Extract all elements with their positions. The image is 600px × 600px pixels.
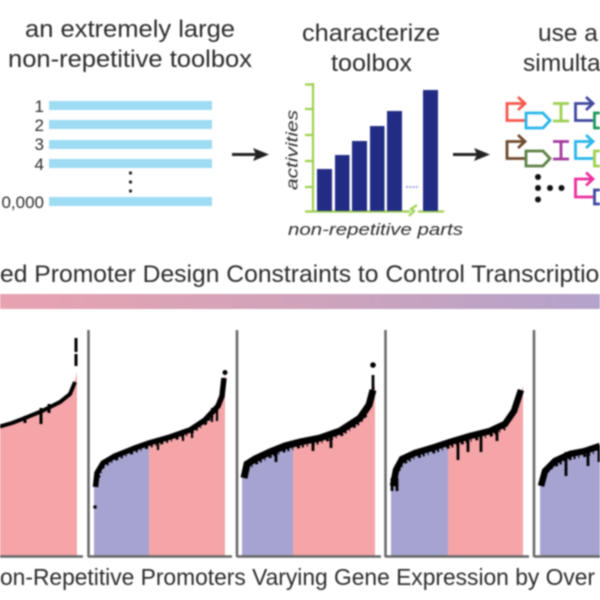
y axis label: activities [282,109,302,190]
vertical ellipsis [129,171,132,193]
panel: promoter activity charts [0,330,600,557]
circuit row 3 [576,172,600,204]
row numbers: 2 [35,116,44,135]
panel: toolbox list [1,97,212,212]
heading: an extremely large non-repetitive toolbox: an extremely large [25,16,235,43]
heading: characterize toolbox [302,20,440,77]
heading: use all simultaneously [523,20,600,77]
bar chart: activities of non-repetitive parts [282,83,464,239]
panel: genetic circuits [507,97,600,204]
gradient bar [0,294,600,309]
part bars [49,101,212,206]
chart bars [317,90,438,211]
x axis label: non-repetitive parts [288,220,464,239]
heading: use all simultaneously: simulta [523,50,600,77]
row numbers [1,97,44,212]
row numbers: 4 [35,155,44,174]
circuit row 2 [507,135,600,166]
chart axes [305,83,444,216]
heading: an extremely large non-repetitive toolbox: non-repetitive toolbox [8,46,252,73]
chart 5 [534,330,600,557]
row numbers: 3 [35,135,44,154]
title: promoter design constraints: ed Promoter Design Constraints to Control Transcription [0,261,600,288]
chart 1 [0,338,83,556]
row numbers: 1 [35,97,44,116]
continuation dots [535,174,564,202]
arrow: characterize to use [453,148,490,161]
heading: characterize toolbox: characterize [302,20,440,47]
row numbers: 0,000 [1,193,44,212]
bar gap dots [406,186,419,188]
arrow: toolbox to characterize [232,148,269,161]
caption: non-repetitive promoters: on-Repetitive Promoters Varying Gene Expression by Over [0,564,595,590]
heading: an extremely large non-repetitive toolbox [8,16,252,73]
heading: characterize toolbox: toolbox [331,50,412,77]
chart 4 [385,330,529,557]
circuit row 1 [507,97,600,128]
chart 2 [88,330,232,557]
chart 3 [237,330,381,557]
heading: use all simultaneously: use a [538,20,598,47]
